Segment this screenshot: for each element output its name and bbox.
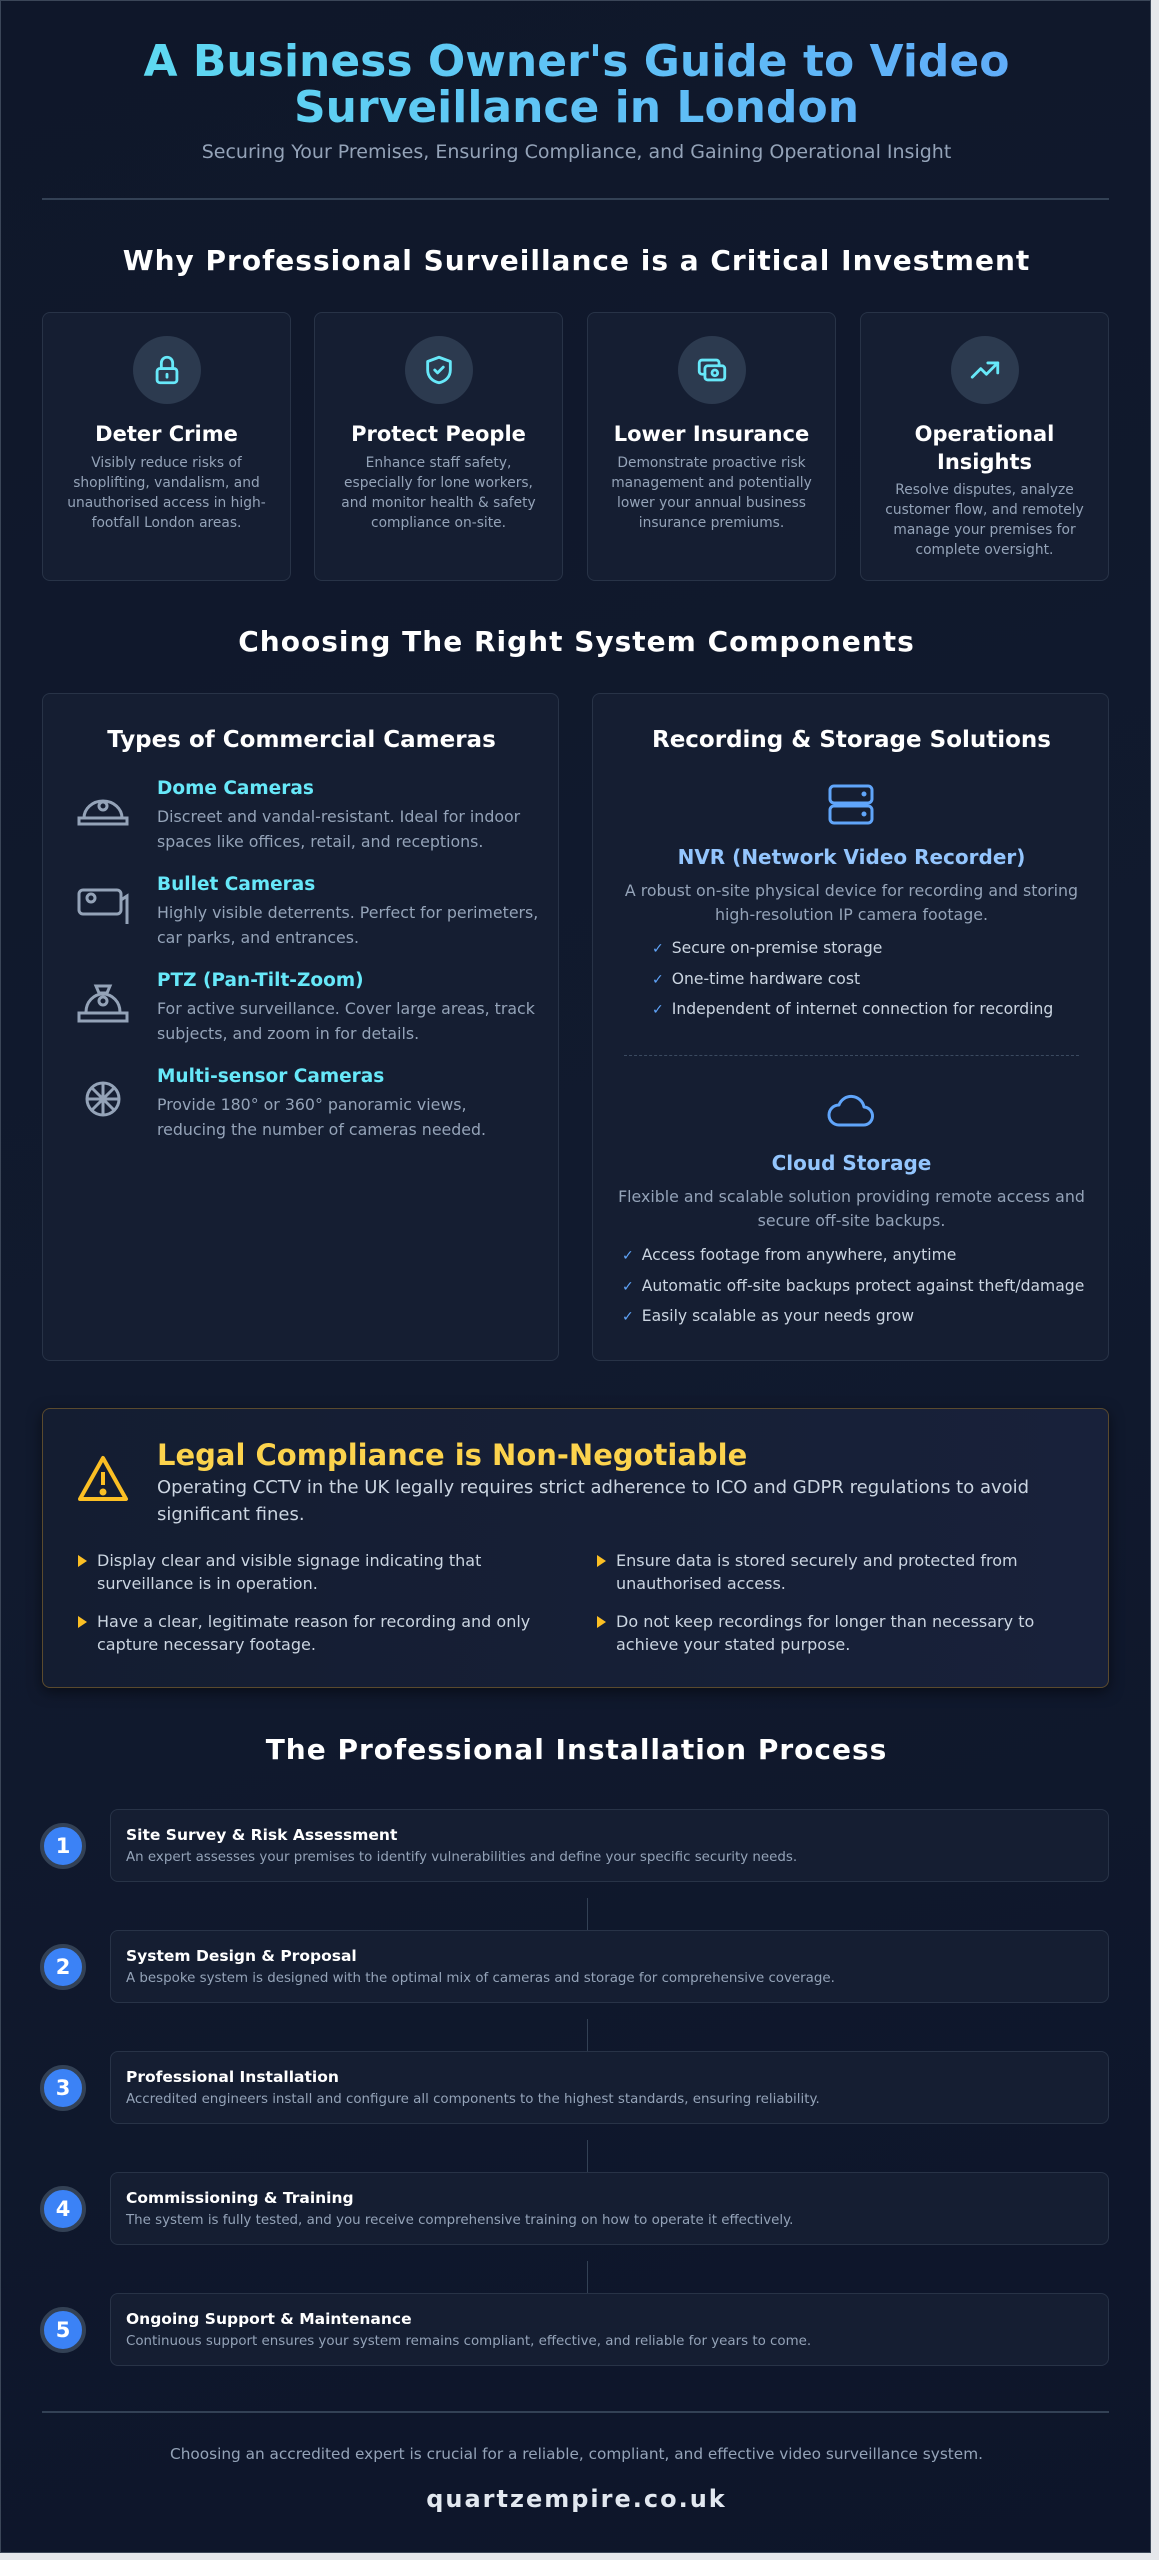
camera: multi-sensor [86,1066,486,1139]
step 5: Ongoing Support & Maintenance [126,2310,412,2328]
panel heading: Types of Commercial Cameras [107,727,496,753]
icon: warning [78,1456,128,1501]
icon: lock [133,336,201,404]
cloud checklist: ✓ Easily scalable as your needs grow [622,1307,914,1325]
camera: bullet: Bullet Cameras [157,874,315,895]
step 2: A bespoke system is designed with the optimal mix of cameras and storage for comprehensive coverage. [126,1971,835,1986]
step 1: Site Survey & Risk Assessment [126,1826,397,1844]
card: operational insights: Operational [915,422,1054,446]
card: operational insights: Resolve disputes, analyze customer flow, and remotely manage your premises for complete oversight. [885,482,1084,558]
NVR checklist: ✓ Independent of internet connection for recording [652,1000,1053,1018]
legal bullets: Ensure data is stored securely and protected from unauthorised access. [616,1551,1018,1593]
icon: trend [951,336,1019,404]
panel: recording & storage [592,693,1109,1361]
cloud description: Flexible and scalable solution providing remote access and secure off-site backups. [618,1187,1085,1230]
legal bullets: Do not keep recordings for longer than necessary to achieve your stated purpose. [616,1612,1034,1654]
step 3 [40,2051,1109,2124]
camera: bullet [78,874,538,947]
NVR description: A robust on-site physical device for recording and storing high-resolution IP camera footage. [625,881,1078,924]
step 5 [40,2293,1109,2366]
card: lower insurance [587,312,836,581]
step 1: 1 [56,1834,70,1858]
step 2 [40,1930,1109,2003]
card: protect people: Protect People [351,422,526,446]
title [1,39,1152,131]
cloud checklist [622,1246,1084,1325]
title: A Business Owner's Guide to Video [144,36,1009,87]
step 3: 3 [56,2076,70,2100]
legal bullets [78,1551,1034,1654]
NVR checklist: ✓ One-time hardware cost [652,970,860,988]
panel: camera types: For active surveillance. Cover large areas, track subjects, and zoom in for details. [157,999,535,1043]
panel heading: Recording & Storage Solutions [652,727,1051,753]
legal bullets: Have a clear, legitimate reason for recording and only capture necessary footage. [97,1612,530,1654]
callout: legal compliance [42,1408,1109,1688]
step 3: Accredited engineers install and configure all components to the highest standards, ensuring reliability. [126,2092,820,2107]
card: lower insurance: Lower Insurance [614,422,809,446]
footer text: Choosing an accredited expert is crucial for a reliable, compliant, and effective video surveillance system. [170,2445,983,2463]
panel: camera types: Highly visible deterrents. Perfect for perimeters, car parks, and entrances. [157,903,538,947]
step 4: 4 [56,2197,70,2221]
card: operational insights: Insights [937,450,1032,474]
camera: dome [78,778,520,851]
card: operational insights [860,312,1109,581]
camera: ptz: PTZ (Pan-Tilt-Zoom) [157,970,364,991]
legal title: Legal Compliance is Non-Negotiable [157,1438,747,1472]
icon: money [678,336,746,404]
NVR checklist: ✓ Secure on-premise storage [652,939,882,957]
icon: cloud [828,1094,874,1126]
heading: installation process: The Professional Installation Process [266,1733,887,1766]
camera: dome: Dome Cameras [157,778,314,799]
card: protect people: Enhance staff safety, especially for lone workers, and monitor health & safety compliance on-site. [341,455,536,531]
NVR checklist [652,939,1053,1018]
subtitle: Securing Your Premises, Ensuring Compliance, and Gaining Operational Insight [202,141,951,163]
icon: shield [405,336,473,404]
cloud title: Cloud Storage [772,1151,931,1175]
cloud checklist: ✓ Automatic off-site backups protect against theft/damage [622,1277,1084,1295]
heading: components: Choosing The Right System Components [238,625,915,658]
step 1 [40,1809,1109,1882]
card: deter crime: Deter Crime [95,422,238,446]
step 1: An expert assesses your premises to identify vulnerabilities and define your specific security needs. [126,1850,797,1865]
legal description: Operating CCTV in the UK legally requires strict adherence to ICO and GDPR regulations to avoid significant fines. [157,1477,1029,1525]
step 5: 5 [56,2318,70,2342]
step 4: Commissioning & Training [126,2189,354,2207]
cloud checklist: ✓ Access footage from anywhere, anytime [622,1246,956,1264]
camera: ptz [78,970,535,1043]
title: Surveillance in London [294,82,859,133]
legal bullets: Display clear and visible signage indicating that surveillance is in operation. [97,1551,481,1593]
camera: multi-sensor: Multi-sensor Cameras [157,1066,384,1087]
heading: why: Why Professional Surveillance is a Critical Investment [123,244,1030,277]
panel: camera types [42,693,559,1361]
panel: camera types: Discreet and vandal-resistant. Ideal for indoor spaces like offices, retail, and receptions. [157,807,520,851]
footer domain: quartzempire.co.uk [426,2485,727,2513]
card: deter crime [42,312,291,581]
panel: camera types: Provide 180° or 360° panoramic views, reducing the number of cameras needed. [157,1095,486,1139]
card: deter crime: Visibly reduce risks of shoplifting, vandalism, and unauthorised access in high-footfall London areas. [67,455,266,531]
step 2: 2 [56,1955,70,1979]
card: protect people [314,312,563,581]
step 3: Professional Installation [126,2068,339,2086]
step 2: System Design & Proposal [126,1947,357,1965]
card: lower insurance: Demonstrate proactive risk management and potentially lower your annual business insurance premiums. [611,455,812,531]
step 5: Continuous support ensures your system remains compliant, effective, and reliable for years to come. [126,2334,811,2349]
step 4: The system is fully tested, and you receive comprehensive training on how to operate it effectively. [126,2213,793,2228]
step 4 [40,2172,1109,2245]
icon: server [828,784,874,824]
NVR title: NVR (Network Video Recorder) [678,845,1025,869]
